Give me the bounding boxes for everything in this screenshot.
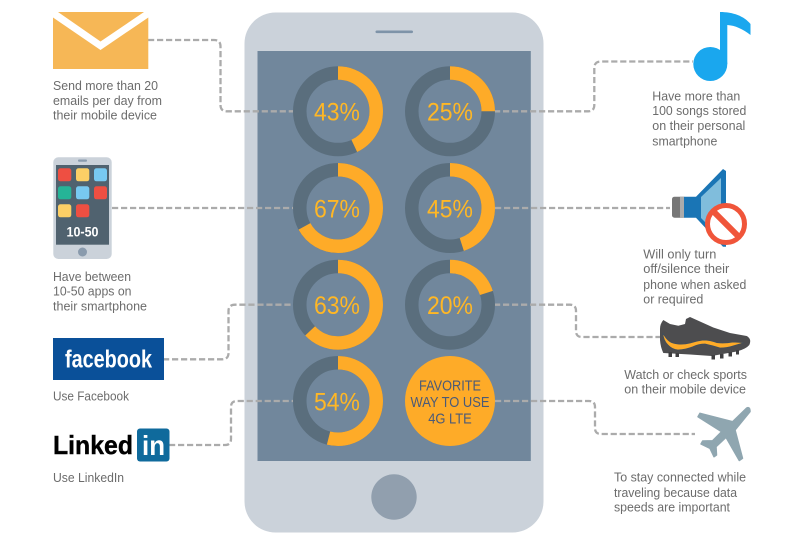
text: shoe: Watch or check sports bbox=[624, 367, 747, 382]
donut: 43%: 43% bbox=[314, 99, 360, 127]
text: apps: 10-50 apps on bbox=[53, 284, 132, 299]
icon: airplane bbox=[698, 408, 750, 460]
donut: 20% bbox=[412, 266, 488, 343]
icon: smartphone with apps bbox=[53, 157, 112, 259]
text: speaker: or required bbox=[643, 292, 703, 306]
donut: 43% bbox=[300, 73, 376, 150]
text: plane: To stay connected while bbox=[614, 470, 746, 485]
donut: 25% bbox=[412, 73, 488, 150]
text: emails bbox=[53, 78, 162, 123]
icon: facebook logo: facebook bbox=[65, 346, 152, 374]
donut: 63%: 63% bbox=[314, 292, 360, 320]
text: plane bbox=[614, 470, 746, 515]
text: facebook: Use Facebook bbox=[53, 389, 129, 404]
connector: linkedin bbox=[169, 401, 294, 445]
donut: 67% bbox=[300, 170, 376, 246]
connector: email bbox=[148, 40, 294, 111]
phone body bbox=[244, 12, 544, 532]
connector: plane bbox=[495, 401, 695, 434]
text: speaker: phone when asked bbox=[643, 277, 746, 292]
connector: shoe bbox=[494, 305, 660, 337]
donut: 54%: 54% bbox=[314, 388, 360, 416]
icon: smartphone with apps: 10-50 bbox=[66, 224, 99, 240]
text: shoe bbox=[624, 367, 747, 397]
badge: favorite way to use 4G LTE bbox=[405, 356, 495, 446]
icon: linkedin logo: Linked bbox=[53, 430, 133, 460]
connector: music bbox=[494, 62, 693, 111]
connector: facebook bbox=[163, 305, 294, 359]
text: emails: their mobile device bbox=[53, 108, 157, 123]
phone screen bbox=[258, 51, 531, 461]
icon: facebook logo bbox=[53, 338, 164, 380]
text: apps bbox=[53, 269, 147, 314]
donut: 67%: 67% bbox=[314, 195, 360, 223]
text: music: on their personal bbox=[652, 118, 745, 133]
text: speaker bbox=[643, 246, 746, 306]
connector: speaker bbox=[495, 207, 670, 209]
donut: 54% bbox=[300, 363, 376, 439]
donut: 25%: 25% bbox=[427, 99, 473, 127]
donut: 45% bbox=[412, 170, 488, 246]
text: music: 100 songs stored bbox=[652, 103, 746, 118]
text: music: Have more than bbox=[652, 88, 740, 104]
text: emails: Send more than 20 bbox=[53, 78, 158, 93]
text: music: smartphone bbox=[652, 134, 717, 148]
badge: favorite way to use 4G LTE: FAVORITE bbox=[419, 378, 481, 395]
icon: envelope bbox=[53, 12, 148, 69]
text: plane: speeds are important bbox=[614, 500, 730, 515]
donut: 63% bbox=[300, 266, 376, 343]
text: apps: their smartphone bbox=[53, 299, 147, 314]
badge: favorite way to use 4G LTE: 4G LTE bbox=[428, 410, 472, 427]
icon: music note bbox=[693, 12, 750, 81]
text: plane: traveling because data bbox=[614, 485, 738, 500]
icon: muted speaker bbox=[672, 169, 744, 247]
donut: 45%: 45% bbox=[427, 195, 473, 223]
text: shoe: on their mobile device bbox=[624, 382, 746, 397]
text: speaker: Will only turn bbox=[643, 246, 716, 262]
text: speaker: off/silence their bbox=[643, 261, 730, 276]
badge: favorite way to use 4G LTE: WAY TO USE bbox=[410, 394, 490, 411]
text: apps: Have between bbox=[53, 269, 131, 284]
text: linkedin: Use LinkedIn bbox=[53, 470, 124, 485]
icon: linkedin logo bbox=[53, 428, 170, 462]
connector: apps bbox=[112, 207, 294, 209]
icon: linkedin logo: in bbox=[142, 430, 165, 461]
donut: 20%: 20% bbox=[427, 292, 473, 320]
text: emails: emails per day from bbox=[53, 93, 162, 108]
text: music bbox=[652, 88, 746, 148]
icon: sports shoe bbox=[660, 317, 750, 360]
